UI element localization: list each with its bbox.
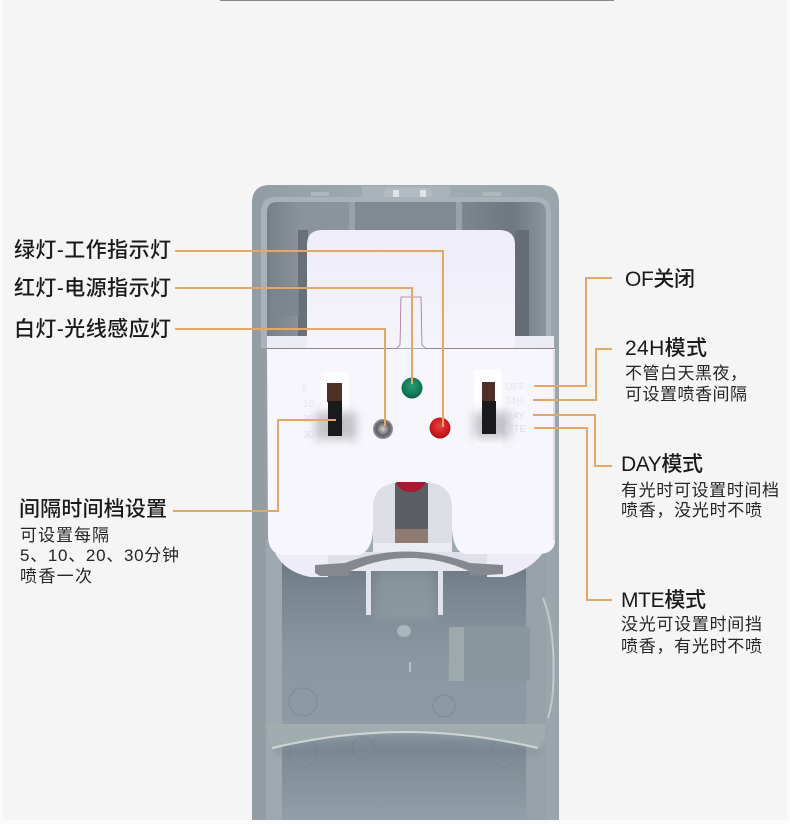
label: interval setting: 可设置每隔 <box>20 526 109 545</box>
centre bump <box>397 625 411 637</box>
faint scale labels: OFF <box>505 382 525 393</box>
label: MTE mode: 没光可设置时间挡 <box>621 615 762 634</box>
label: red light: 红灯-电源指示灯 <box>14 277 171 300</box>
label: DAY mode: 有光时可设置时间档 <box>621 481 779 500</box>
left slider <box>316 372 356 447</box>
curved ledge <box>266 724 545 754</box>
faint scale labels: 5 <box>302 383 308 394</box>
panel: dispenser product photo <box>252 185 559 820</box>
red LED <box>430 418 450 438</box>
top image sliver <box>220 0 614 1</box>
moulded circles <box>289 688 518 767</box>
dispenser nozzle arch <box>373 482 452 552</box>
label: interval setting: 5、10、20、30分钟 <box>20 546 179 565</box>
faint scale labels: 24H <box>505 396 523 407</box>
right side spring <box>543 598 554 718</box>
label: 24H mode: 可设置喷香间隔 <box>625 385 747 404</box>
green LED <box>402 378 422 398</box>
top latch <box>311 186 501 201</box>
right flap <box>449 627 530 681</box>
label: DAY mode: DAY模式 <box>621 453 703 476</box>
label: off: OF关闭 <box>625 268 695 291</box>
white cover plate <box>307 230 515 348</box>
label: white light: 白灯-光线感应灯 <box>14 318 171 341</box>
leader lines <box>173 251 612 600</box>
label: interval setting: 喷香一次 <box>20 567 92 586</box>
right slider <box>474 369 510 446</box>
label: DAY mode <box>621 453 779 520</box>
upper compartment <box>261 197 551 348</box>
label: DAY mode: 喷香，没光时不喷 <box>621 501 762 520</box>
label: 24H mode <box>625 337 747 404</box>
label: 24H mode: 24H模式 <box>625 337 707 360</box>
lower compartment <box>252 540 559 820</box>
light sensor LED <box>373 419 393 439</box>
faint scale labels: MTE <box>505 424 526 435</box>
small mark <box>409 662 411 672</box>
cover tab slot <box>396 297 427 349</box>
metal spring clip <box>315 552 503 576</box>
label: interval setting <box>19 498 179 586</box>
label: MTE mode: 喷香，有光时不喷 <box>621 637 762 656</box>
faint scale labels <box>302 382 526 441</box>
dispenser outer shell <box>252 185 559 820</box>
control module housing <box>267 336 555 577</box>
label: green light: 绿灯-工作指示灯 <box>14 239 171 262</box>
label: interval setting: 间隔时间档设置 <box>19 498 167 521</box>
label: 24H mode: 不管白天黑夜， <box>625 364 747 383</box>
faint scale labels: 30 <box>303 430 315 441</box>
faint scale labels: 10 <box>303 399 315 410</box>
faint scale labels: DAY <box>505 411 525 422</box>
label: MTE mode: MTE模式 <box>621 589 706 612</box>
faint scale labels: 20 <box>303 414 315 425</box>
lower support pins <box>366 568 443 615</box>
label: MTE mode <box>621 589 762 656</box>
